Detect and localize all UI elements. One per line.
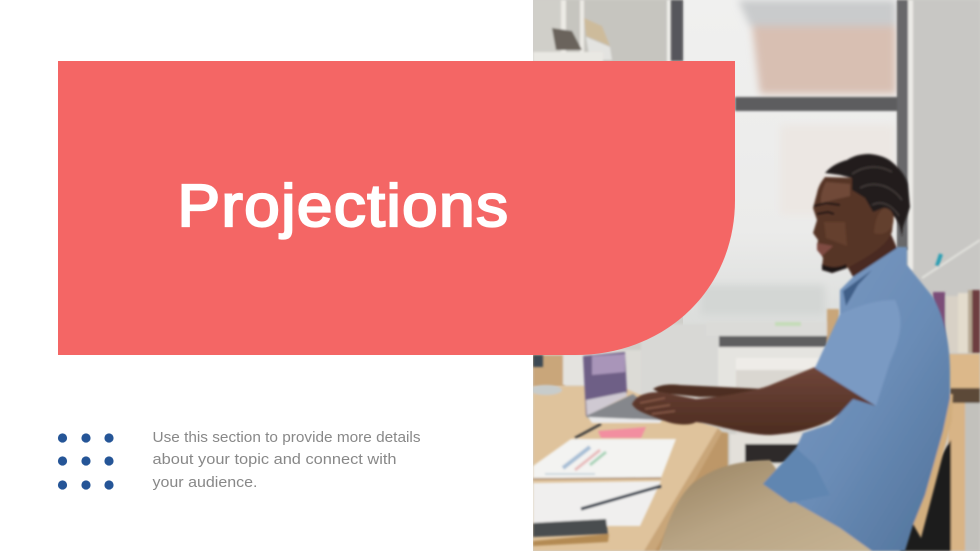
photo base bbox=[533, 0, 980, 551]
trousers bbox=[660, 460, 872, 551]
braid lines bbox=[852, 167, 902, 216]
panel: coral title block bbox=[58, 61, 735, 355]
chair back bbox=[913, 394, 953, 538]
forehead highlight bbox=[821, 182, 850, 204]
hair bbox=[825, 154, 910, 237]
far arm bbox=[653, 384, 765, 397]
icon: dot grid bbox=[58, 433, 114, 490]
sleeve highlight bbox=[815, 300, 900, 406]
finger highlights bbox=[640, 398, 675, 414]
wall and shelves bbox=[533, 0, 671, 61]
description text: Use this section to provide more details bbox=[152, 429, 420, 446]
collar shadow bbox=[843, 270, 872, 306]
radiator and room furniture bbox=[533, 309, 839, 470]
description text: about your topic and connect with bbox=[152, 451, 396, 468]
hazy view through window bbox=[700, 0, 896, 315]
shirt hem bbox=[763, 448, 830, 503]
face bbox=[813, 177, 895, 273]
photo: man working at a laptop bbox=[530, 0, 980, 551]
title: Projections bbox=[178, 173, 508, 239]
brow and eye bbox=[814, 203, 840, 214]
near arm and hand bbox=[632, 367, 880, 435]
desk bbox=[530, 355, 728, 551]
papers, pens and sticky note bbox=[533, 424, 676, 546]
cheek highlight bbox=[824, 222, 847, 246]
window frame bbox=[671, 0, 913, 270]
man bbox=[632, 154, 953, 551]
description text: your audience. bbox=[152, 474, 258, 491]
right wall, clip and bookshelf bbox=[900, 240, 980, 551]
neck bbox=[847, 232, 897, 277]
laptop bbox=[583, 352, 665, 423]
ear bbox=[874, 208, 894, 234]
window panes bbox=[683, 0, 897, 330]
shirt bbox=[794, 245, 952, 551]
mouth bbox=[817, 243, 833, 256]
beard bbox=[822, 264, 847, 273]
description text bbox=[152, 429, 420, 491]
